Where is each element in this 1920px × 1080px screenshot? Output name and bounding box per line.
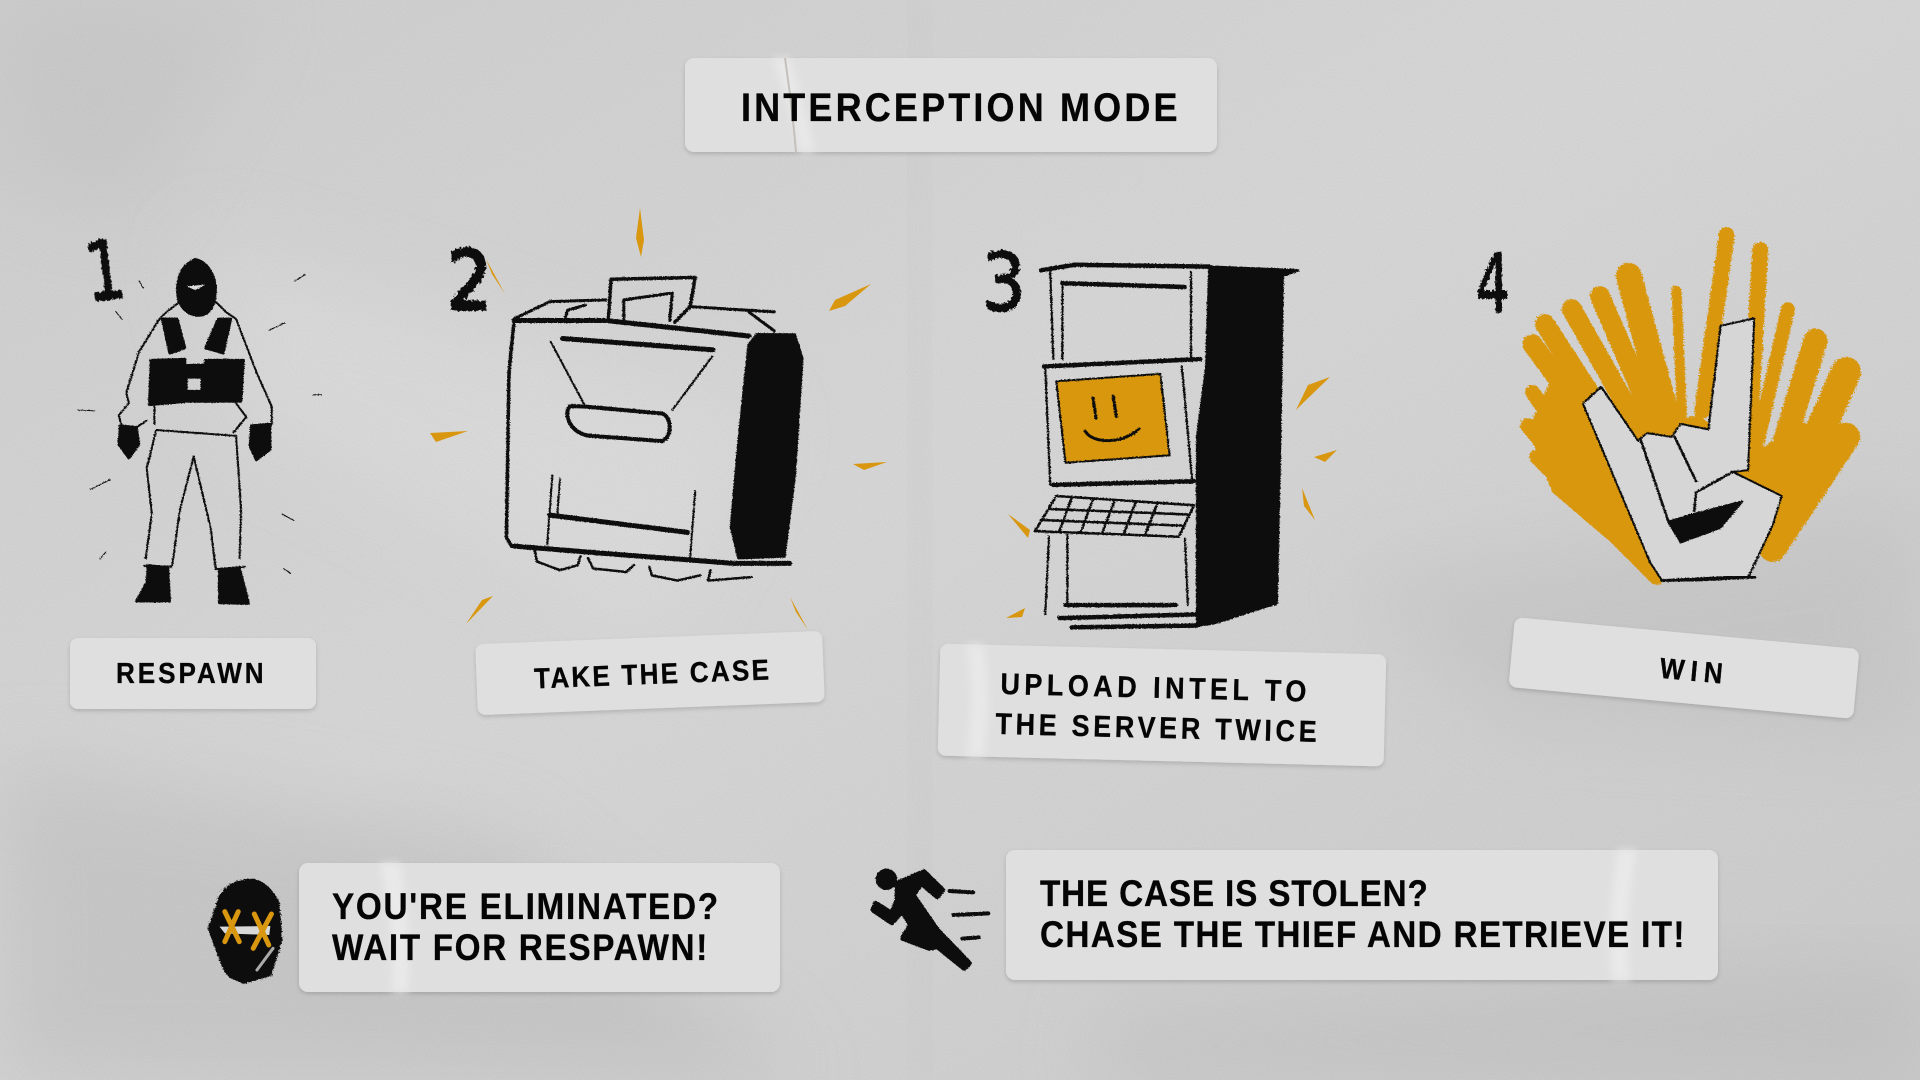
label: take the case xyxy=(475,631,825,715)
label: respawn xyxy=(70,638,316,709)
label: take the case: TAKE THE CASE xyxy=(533,653,769,695)
icon: running figure xyxy=(873,869,988,968)
step 1: respawn xyxy=(70,222,321,709)
illustration: rock hand with orange burst xyxy=(1528,235,1846,581)
orange sparks around server xyxy=(996,377,1337,732)
step 3: upload intel xyxy=(938,237,1386,766)
number 1: 1 xyxy=(80,222,130,321)
illustration: server terminal xyxy=(1035,265,1298,627)
text: eliminated xyxy=(332,886,718,968)
label: upload intel: THE SERVER TWICE xyxy=(995,708,1317,749)
callout: eliminated xyxy=(209,863,780,992)
title: INTERCEPTION MODE xyxy=(741,86,1178,130)
number 4: 4 xyxy=(1476,237,1510,332)
step 2: take the case xyxy=(430,208,887,715)
card xyxy=(299,863,780,992)
label: upload intel: UPLOAD INTEL TO xyxy=(1000,668,1307,709)
label: win xyxy=(1509,617,1859,719)
text: eliminated: YOU'RE ELIMINATED? xyxy=(332,886,718,927)
icon: skull with crossed eyes xyxy=(209,880,281,983)
callout: stolen case xyxy=(873,850,1718,980)
text: stolen case: CHASE THE THIEF AND RETRIEVE IT! xyxy=(1040,914,1684,955)
step 1: respawn: RESPAWN xyxy=(116,657,264,689)
illustration: briefcase xyxy=(506,277,802,581)
label: win: WIN xyxy=(1658,652,1724,690)
text: stolen case: THE CASE IS STOLEN? xyxy=(1040,873,1428,914)
orange sparks around briefcase xyxy=(430,208,887,630)
title xyxy=(685,58,1217,152)
card xyxy=(1006,850,1718,980)
label: upload intel xyxy=(938,644,1386,766)
illustration: masked soldier xyxy=(78,259,321,604)
number 2: 2 xyxy=(447,233,492,328)
text: eliminated: WAIT FOR RESPAWN! xyxy=(332,927,707,968)
text: stolen case xyxy=(1040,873,1684,955)
step 4: win xyxy=(1476,235,1859,719)
number 3: 3 xyxy=(982,237,1026,329)
